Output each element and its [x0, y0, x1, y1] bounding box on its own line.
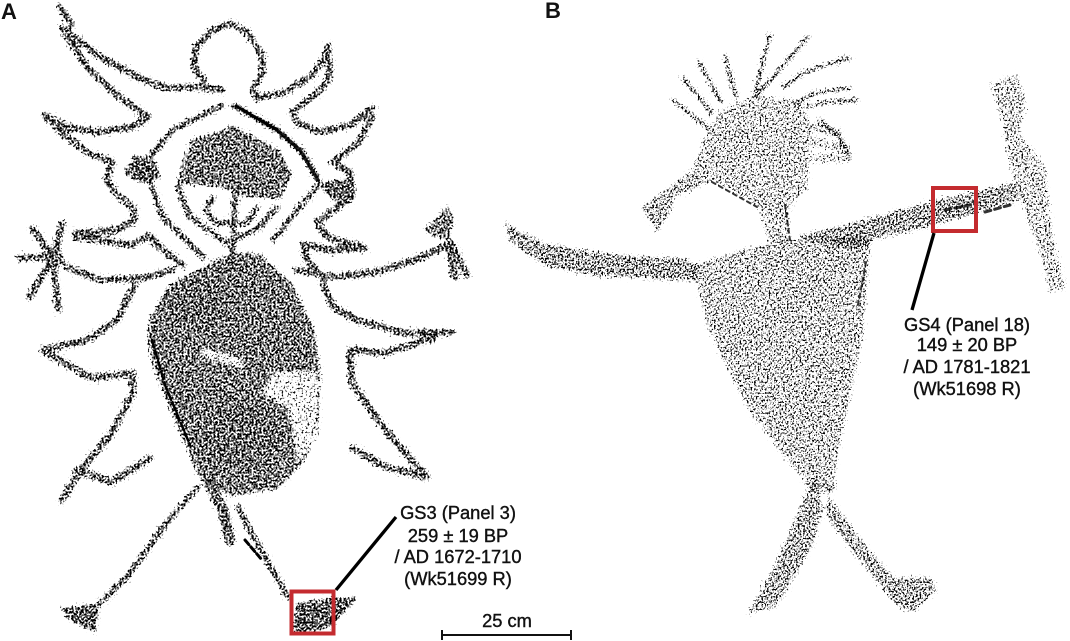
sample text: / AD 1672-1710 [394, 546, 522, 567]
figure B: anthropomorphic rock art [505, 35, 1066, 615]
lower arms [42, 283, 452, 500]
head rays [673, 35, 857, 157]
groin strip [208, 480, 230, 540]
sample text: (Wk51699 R) [404, 568, 512, 589]
darker zones of body [198, 403, 282, 467]
scale line [442, 630, 571, 640]
star hand centre and triangular hand [43, 205, 455, 272]
sample text: / AD 1781-1821 [903, 356, 1031, 377]
face dome [177, 125, 293, 200]
legs and feet [747, 478, 938, 615]
red sample box [933, 188, 976, 231]
left arm [505, 222, 700, 282]
horns and outer appendages, right [257, 45, 372, 270]
club [990, 73, 1066, 293]
head fringe [815, 128, 848, 158]
sample text: GS4 (Panel 18) [904, 314, 1030, 335]
horns and outer appendages, left [45, 7, 222, 265]
legs [100, 487, 288, 603]
figure A: anthropomorphic rock art [20, 7, 467, 635]
beak [640, 170, 712, 233]
callout GS3 [292, 502, 522, 634]
sample text: 149 ± 20 BP [917, 334, 1017, 355]
right arm [794, 182, 1020, 250]
scale bar [442, 610, 571, 640]
eye outline [147, 105, 320, 257]
red sample box [292, 592, 334, 634]
sample text: (Wk51698 R) [913, 378, 1021, 399]
face lower circle and mouth [178, 187, 277, 267]
upper arms with hands [20, 223, 467, 310]
solid dark strokes on figure A [152, 106, 318, 560]
feet [58, 597, 360, 635]
sample text [394, 502, 522, 589]
torso [690, 236, 872, 492]
dark grains on figure B [712, 182, 1010, 305]
callout GS4 [903, 188, 1031, 399]
leader line [336, 517, 396, 590]
head [692, 95, 812, 243]
pale patches of body [200, 348, 318, 462]
darker upper body [165, 274, 225, 326]
eye side blobs [122, 155, 354, 202]
sample text [903, 314, 1031, 399]
sample text: GS3 (Panel 3) [400, 502, 516, 523]
sample text: 259 ± 19 BP [408, 525, 508, 546]
scale label: 25 cm [482, 610, 532, 631]
head loop [194, 23, 263, 98]
body with pale areas left open [146, 252, 321, 497]
leader line [912, 233, 934, 310]
